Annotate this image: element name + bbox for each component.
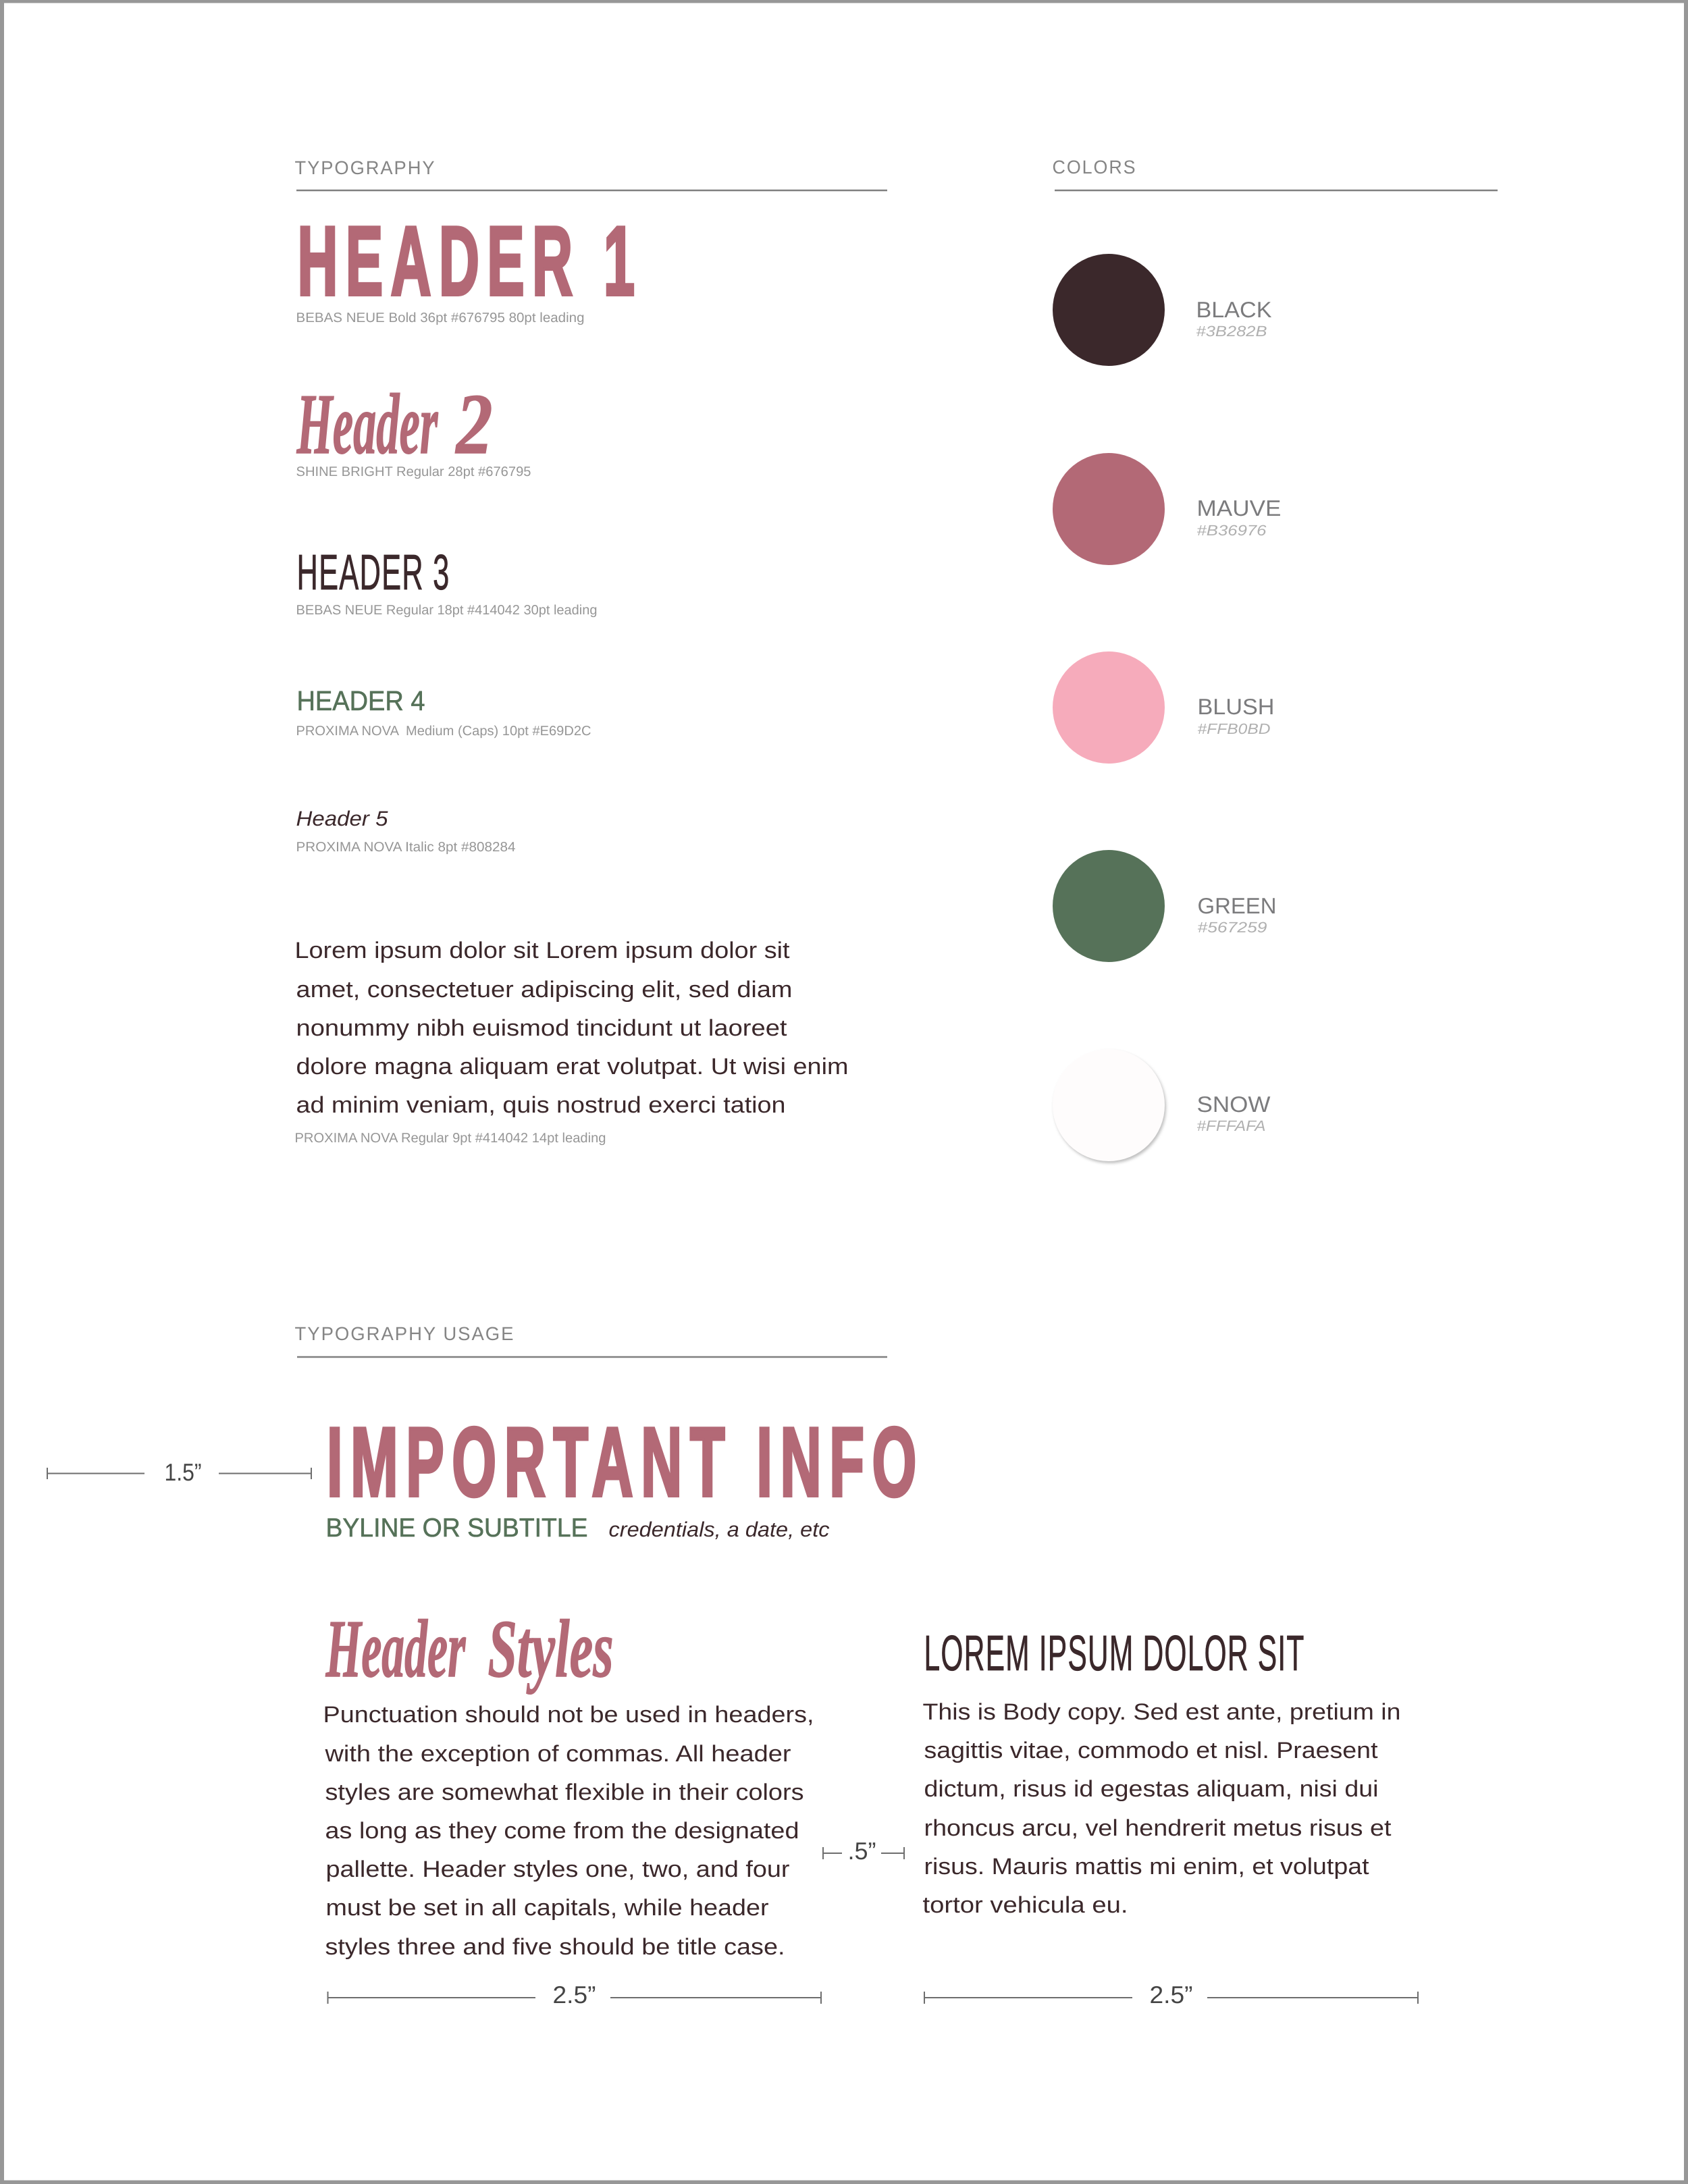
column text: rhoncus arcu, vel hendrerit metus risus et: [924, 1815, 1392, 1841]
specimen: header 5: [296, 807, 516, 855]
heading: typography: TYPOGRAPHY: [294, 157, 436, 178]
byline and credentials: credentials, a date, etc: [609, 1518, 830, 1541]
swatch: blush: #FFB0BD: [1198, 720, 1271, 737]
swatch: mauve: [1053, 453, 1282, 565]
swatch: green: [1053, 850, 1276, 962]
column heading: LOREM IPSUM DOLOR SIT: [924, 1625, 1304, 1681]
title: important info: IMPORTANT INFO: [327, 1407, 924, 1516]
script heading: Header: [325, 1603, 466, 1695]
column text: [323, 1702, 814, 1960]
column text: as long as they come from the designated: [325, 1818, 799, 1844]
dimension: 2.5 inch column: [328, 1981, 821, 2008]
swatch: black: #3B282B: [1196, 323, 1267, 340]
specimen: header 2: 2: [455, 376, 493, 472]
column text: styles three and five should be title case.: [325, 1934, 785, 1960]
column text: sagittis vitae, commodo et nisl. Praesent: [924, 1738, 1378, 1763]
dimension: 2.5 inch column: 2.5”: [1149, 1981, 1192, 2008]
panel: typography: [294, 157, 887, 1146]
column text: tortor vehicula eu.: [922, 1892, 1128, 1918]
script heading: Styles: [487, 1603, 613, 1695]
specimen: body copy: Lorem ipsum dolor sit Lorem ipsum dolor sit: [294, 938, 790, 963]
dimension: 0.5 inch gutter: .5”: [848, 1837, 876, 1865]
column text: This is Body copy. Sed est ante, pretium in: [922, 1699, 1400, 1725]
column text: styles are somewhat flexible in their colors: [325, 1780, 803, 1805]
specimen: body copy: [294, 938, 848, 1146]
column text: pallette. Header styles one, two, and four: [325, 1857, 790, 1882]
specimen: header 5: Header 5: [296, 807, 388, 830]
panel: colors: [1052, 157, 1498, 1161]
specimen: header 3: HEADER 3: [297, 544, 450, 600]
specimen: header 3: BEBAS NEUE Regular 18pt #414042 30pt leading: [296, 603, 597, 618]
specimen: body copy: nonummy nibh euismod tincidunt ut laoreet: [296, 1015, 787, 1041]
swatch: green: GREEN: [1198, 893, 1276, 918]
specimen: header 4: HEADER 4: [297, 685, 425, 716]
swatch: mauve: #B36976: [1196, 522, 1267, 539]
specimen: header 1: [296, 207, 643, 325]
column text: must be set in all capitals, while header: [325, 1895, 768, 1921]
specimen: header 4: [296, 685, 591, 739]
specimen: header 2: SHINE BRIGHT Regular 28pt #676795: [296, 464, 531, 479]
dimension: 0.5 inch gutter: [823, 1837, 904, 1865]
specimen: body copy: ad minim veniam, quis nostrud exerci tation: [296, 1092, 786, 1118]
column: lorem ipsum: [922, 1625, 1418, 2008]
dimension: 2.5 inch column: [924, 1981, 1418, 2008]
swatch: blush: [1053, 651, 1275, 764]
swatch: black: [1053, 254, 1272, 366]
specimen: header 1: BEBAS NEUE Bold 36pt #676795 80pt leading: [296, 311, 585, 325]
column text: [922, 1699, 1400, 1918]
specimen: body copy: amet, consectetuer adipiscing elit, sed diam: [296, 977, 793, 1003]
swatch: snow: #FFFAFA: [1196, 1117, 1265, 1134]
byline and credentials: [325, 1514, 830, 1543]
specimen: header 4: PROXIMA NOVA Medium (Caps) 10pt #E69D2C: [296, 724, 591, 739]
swatch: green: #567259: [1198, 919, 1267, 936]
specimen: header 3: [296, 544, 597, 618]
dimension: 1.5 inch margin: [47, 1458, 311, 1486]
swatch: black: BLACK: [1196, 297, 1272, 322]
panel: typography usage: [47, 1323, 1418, 2008]
column text: risus. Mauris mattis mi enim, et volutpat: [924, 1854, 1369, 1880]
swatch: mauve: MAUVE: [1196, 496, 1282, 521]
column text: Punctuation should not be used in headers,: [323, 1702, 814, 1728]
heading: colors: COLORS: [1052, 157, 1137, 178]
swatch: snow: [1053, 1049, 1271, 1161]
heading: typography usage: TYPOGRAPHY USAGE: [294, 1323, 515, 1344]
dimension: 2.5 inch column: 2.5”: [552, 1981, 596, 2008]
byline and credentials: BYLINE OR SUBTITLE: [325, 1514, 587, 1543]
dimension: 1.5 inch margin: 1.5”: [165, 1458, 201, 1486]
specimen: header 5: PROXIMA NOVA Italic 8pt #808284: [296, 840, 516, 855]
swatch: snow: SNOW: [1196, 1092, 1271, 1117]
column: header styles: [323, 1603, 821, 2008]
column text: with the exception of commas. All header: [324, 1741, 791, 1767]
specimen: body copy: PROXIMA NOVA Regular 9pt #414042 14pt leading: [294, 1131, 606, 1146]
specimen: header 2: Header: [296, 376, 438, 472]
specimen: header 1: HEADER 1: [297, 207, 643, 316]
specimen: body copy: dolore magna aliquam erat volutpat. Ut wisi enim: [296, 1054, 848, 1080]
swatch: blush: BLUSH: [1198, 694, 1275, 719]
column text: dictum, risus id egestas aliquam, nisi dui: [924, 1776, 1379, 1802]
